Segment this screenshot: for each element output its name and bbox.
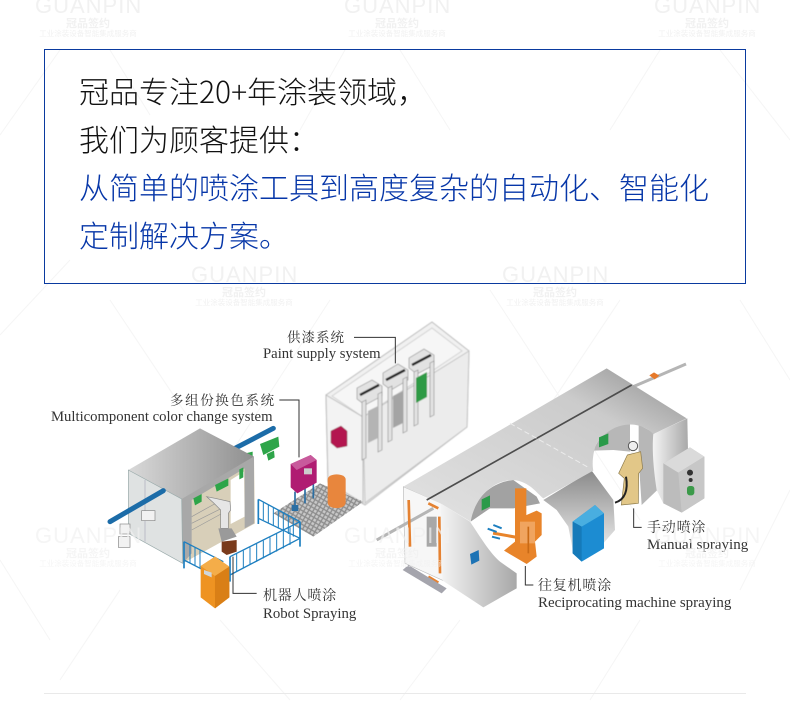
second arch back wall	[593, 422, 657, 505]
watermark middle left: GUANPIN	[191, 262, 298, 287]
roof ridge	[427, 385, 632, 500]
watermark top right: 冠品签约	[685, 15, 729, 31]
label: multicomponent color change: 多组份换色系统	[170, 392, 276, 408]
label: multicomponent color change: Multicomponent color change system	[51, 409, 273, 425]
green cabinets back	[245, 437, 279, 461]
booth rail back	[235, 428, 273, 448]
watermark lower right: 冠品签约	[685, 545, 729, 561]
green filters	[482, 495, 490, 511]
rail left	[377, 508, 433, 540]
label: multicomponent color change	[51, 392, 276, 425]
watermark lower right: GUANPIN	[654, 523, 761, 548]
label: reciprocating machine spraying: Reciprocating machine spraying	[538, 595, 732, 611]
orange barrel	[328, 474, 346, 508]
watermark lower centre: GUANPIN	[344, 523, 451, 548]
booth roof	[128, 428, 254, 499]
blue cabinet	[573, 505, 604, 562]
hanging units	[118, 511, 155, 547]
watermark lower centre: 工业涂装设备智能集成服务商	[348, 558, 446, 569]
label: reciprocating machine spraying	[538, 577, 732, 611]
reciprocating machine	[493, 488, 542, 564]
highlighted line 3: 从简单的喷涂工具到高度复杂的自动化、智能化	[79, 164, 709, 208]
text line 2: 我们为顾客提供：	[79, 116, 319, 160]
middle leg	[543, 471, 615, 553]
watermark top centre	[344, 0, 451, 39]
green cabinets in booth	[193, 467, 243, 505]
label: robot spraying: 机器人喷涂	[263, 587, 337, 604]
icon: magenta box on wall	[331, 426, 347, 448]
tunnel roof	[403, 368, 687, 522]
booth side	[128, 470, 183, 563]
watermark middle left	[191, 262, 298, 308]
label: paint supply system	[263, 329, 381, 362]
watermark lower left	[35, 523, 142, 569]
first arch back wall	[471, 480, 540, 522]
text line 1: 冠品专注20+年涂装领域，	[79, 68, 427, 112]
watermark top right	[654, 0, 761, 39]
watermark top left	[35, 0, 142, 39]
watermark top centre: 冠品签约	[375, 15, 419, 31]
leader line manual	[634, 508, 642, 527]
booth rail front	[110, 491, 163, 522]
booth end frame	[403, 487, 443, 581]
robot arm	[207, 497, 237, 555]
magenta control cabinet	[291, 455, 317, 511]
floor grate	[273, 483, 363, 537]
booth inside	[182, 457, 255, 563]
frame uprights	[409, 500, 440, 573]
bottom rule	[44, 693, 746, 694]
watermark lower centre: 冠品签约	[375, 545, 419, 561]
leader line reciprocating	[525, 566, 533, 585]
watermark top left: 冠品签约	[66, 15, 110, 31]
watermark middle right: 冠品签约	[533, 284, 577, 300]
tunnel spray booth	[377, 364, 704, 607]
leader color change	[279, 400, 299, 457]
watermark lower left: 工业涂装设备智能集成服务商	[39, 558, 137, 569]
watermark middle right	[502, 262, 609, 308]
watermark middle right: 工业涂装设备智能集成服务商	[506, 297, 604, 308]
watermark middle left: 冠品签约	[222, 284, 266, 300]
booth frame	[182, 457, 254, 563]
watermark top centre: 工业涂装设备智能集成服务商	[348, 28, 446, 39]
blue fence	[184, 499, 300, 582]
watermark lower left: 冠品签约	[66, 545, 110, 561]
worker figure	[615, 441, 643, 505]
highlighted line 4: 定制解决方案。	[79, 212, 289, 256]
control box	[663, 447, 704, 513]
watermark lower left: GUANPIN	[35, 523, 142, 548]
label: manual spraying: Manual spraying	[647, 537, 749, 553]
right leg	[653, 418, 688, 503]
label: manual spraying	[647, 519, 749, 553]
icon: paint supply pumps	[357, 349, 434, 460]
watermark lower centre	[344, 523, 451, 569]
watermark middle left: 工业涂装设备智能集成服务商	[195, 297, 293, 308]
label: reciprocating machine spraying: 往复机喷涂	[538, 577, 612, 594]
watermark lower right	[654, 523, 761, 569]
label: robot spraying	[263, 587, 357, 622]
label: robot spraying: Robot Spraying	[263, 606, 357, 622]
leader paint supply	[354, 337, 395, 363]
blue panel	[470, 550, 479, 565]
leader robot	[233, 557, 257, 593]
watermark middle right: GUANPIN	[502, 262, 609, 287]
watermark top right: 工业涂装设备智能集成服务商	[658, 28, 756, 39]
rail right	[633, 364, 686, 387]
intro text panel	[44, 49, 746, 284]
robot spray booth	[110, 337, 395, 608]
label: manual spraying: 手动喷涂	[647, 519, 706, 536]
label: paint supply system: Paint supply system	[263, 346, 381, 362]
watermark lower right: 工业涂装设备智能集成服务商	[658, 558, 756, 569]
orange control cabinet	[201, 557, 229, 608]
watermark top left: 工业涂装设备智能集成服务商	[39, 28, 137, 39]
left leg	[441, 503, 517, 607]
label: paint supply system: 供漆系统	[287, 329, 345, 345]
paint supply room	[326, 322, 469, 505]
